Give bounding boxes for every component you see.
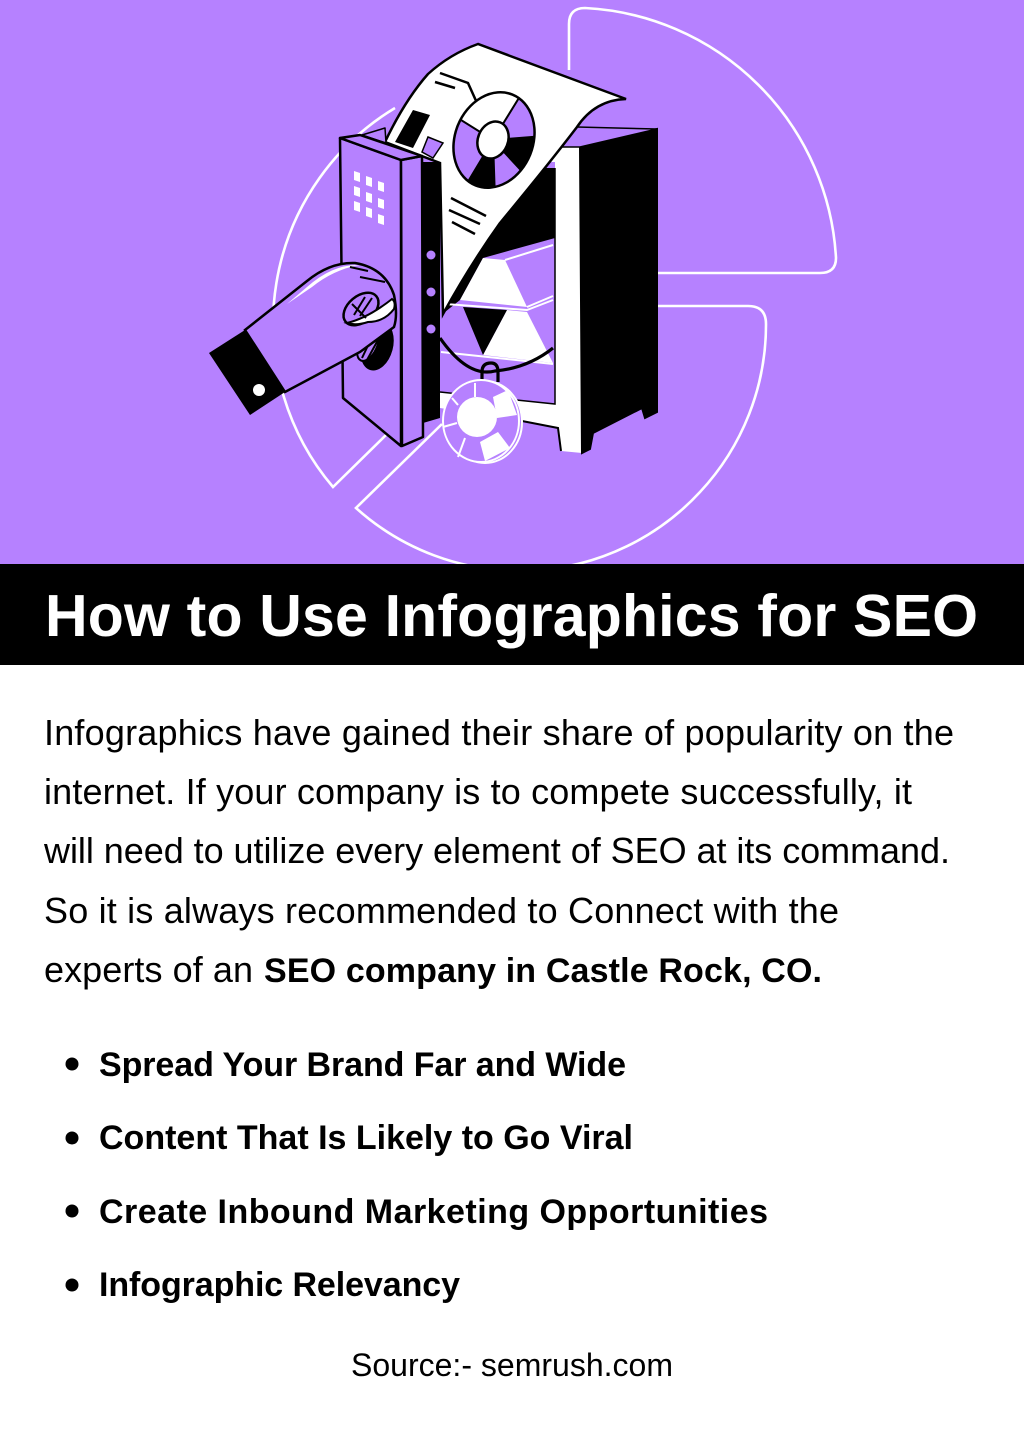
intro paragraph: internet. If your company is to compete successfully, it bbox=[44, 771, 912, 812]
bullet 2: Content That Is Likely to Go Viral bbox=[99, 1119, 633, 1157]
door keypad bbox=[354, 171, 384, 225]
intro paragraph: Infographics have gained their share of popularity on the bbox=[44, 712, 954, 753]
bullet list bbox=[66, 1046, 768, 1304]
document with chart bbox=[385, 44, 626, 314]
gold bars bbox=[441, 245, 553, 364]
bullet 1: Spread Your Brand Far and Wide bbox=[99, 1046, 626, 1084]
shirt cuff bbox=[209, 330, 285, 415]
safe door bbox=[340, 128, 423, 446]
panel: purple hero banner bbox=[0, 0, 1024, 571]
intro paragraph: SEO company in Castle Rock, CO. bbox=[264, 952, 822, 990]
source line: Source:- semrush.com bbox=[351, 1347, 673, 1383]
intro paragraph bbox=[43, 712, 954, 990]
title band bbox=[0, 564, 1024, 665]
pie chart on document bbox=[452, 91, 536, 189]
safe body bbox=[423, 127, 657, 453]
intro paragraph: So it is always recommended to Connect with the bbox=[44, 890, 839, 931]
door dial bbox=[353, 318, 399, 374]
lock wire bbox=[440, 338, 553, 382]
intro paragraph: will need to utilize every element of SEO at its command. bbox=[43, 830, 950, 871]
intro paragraph: experts of an bbox=[44, 949, 253, 990]
door hinges bbox=[426, 250, 436, 334]
hand bbox=[209, 263, 396, 415]
illustration: safe with document and hand bbox=[209, 44, 657, 463]
bullet 3: Create Inbound Marketing Opportunities bbox=[99, 1193, 768, 1231]
background pie chart outline bbox=[273, 8, 836, 571]
title band: How to Use Infographics for SEO bbox=[45, 583, 978, 649]
poker chip bbox=[443, 380, 522, 463]
bullet 4: Infographic Relevancy bbox=[99, 1266, 460, 1304]
